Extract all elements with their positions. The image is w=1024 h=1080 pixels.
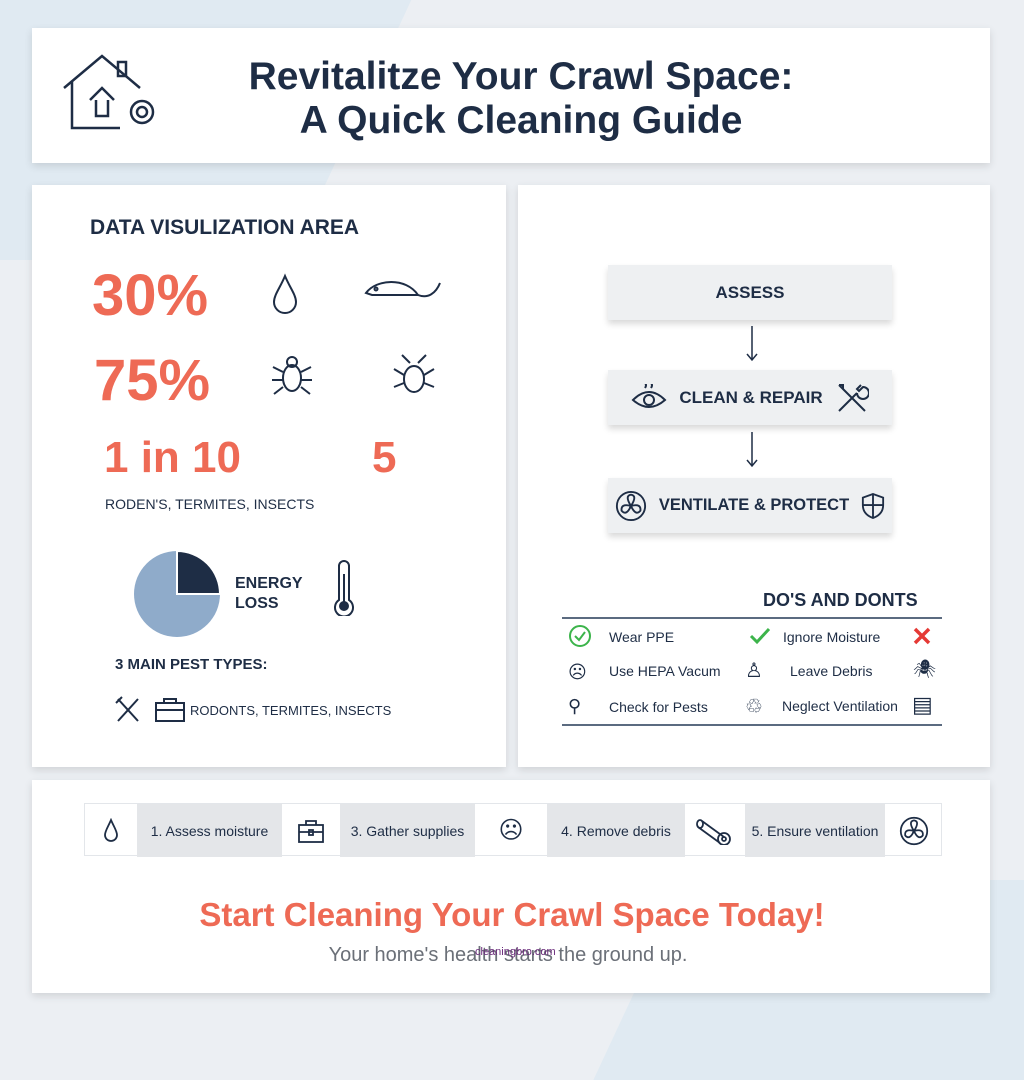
dos and donts: Ignore Moisture bbox=[783, 629, 880, 645]
step icon: fan bbox=[900, 816, 928, 846]
stat 5: 5 bbox=[372, 433, 396, 482]
title: A Quick Cleaning Guide bbox=[300, 99, 742, 142]
step: clean & repair bbox=[608, 370, 892, 425]
row 2: 🕷 bbox=[913, 659, 936, 679]
row 2 bbox=[568, 659, 936, 682]
panel: bottom bbox=[32, 780, 990, 993]
dos and donts: Wear PPE bbox=[609, 629, 674, 645]
icon: cockroach bbox=[394, 354, 434, 393]
icons: tools bbox=[115, 696, 185, 722]
call to action: Start Cleaning Your Crawl Space Today! bbox=[199, 896, 825, 933]
step: ventilate & protect: VENTILATE & PROTECT bbox=[659, 496, 849, 514]
step icon: toolbox bbox=[298, 820, 324, 843]
step 5: 5. Ensure ventilation bbox=[752, 822, 878, 838]
row 2: ☹ bbox=[568, 662, 587, 682]
step: assess bbox=[608, 265, 892, 320]
step 5 bbox=[745, 804, 885, 857]
row 2: Leave Debris bbox=[790, 663, 872, 679]
energy loss label: LOSS bbox=[235, 595, 279, 612]
watermark: cleaningbro.com bbox=[475, 946, 556, 958]
step: assess: ASSESS bbox=[716, 282, 784, 302]
pest types heading: 3 MAIN PEST TYPES: bbox=[115, 656, 268, 673]
step 3: 3. Gather supplies bbox=[351, 822, 464, 838]
icon: bug bbox=[272, 356, 312, 395]
dos and donts bbox=[562, 590, 942, 726]
row 2: ♙ bbox=[745, 660, 763, 682]
stat 30%: 30% bbox=[92, 263, 208, 328]
step: clean & repair: CLEAN & REPAIR bbox=[679, 388, 823, 406]
energy loss label bbox=[235, 575, 303, 612]
icon: water drop bbox=[273, 274, 297, 314]
row 3 bbox=[568, 692, 933, 718]
pest caption: RODEN'S, TERMITES, INSECTS bbox=[105, 496, 314, 512]
step icon: drop bbox=[104, 818, 118, 842]
step: ventilate & protect bbox=[608, 478, 892, 533]
icon: rat bbox=[364, 281, 441, 298]
icon: thermometer bbox=[334, 560, 354, 616]
stat 1 in 10: 1 in 10 bbox=[104, 433, 241, 482]
title panel bbox=[32, 28, 990, 163]
row 3: ▤ bbox=[912, 692, 933, 717]
title bbox=[249, 55, 793, 142]
energy loss label: ENERGY bbox=[235, 575, 303, 592]
arrow bbox=[746, 432, 758, 467]
panel: data visualization bbox=[32, 185, 506, 767]
pie chart bbox=[134, 551, 220, 637]
row 2: Use HEPA Vacum bbox=[609, 663, 721, 679]
row 3: ♲ bbox=[745, 696, 763, 718]
icon: house with gear bbox=[63, 54, 154, 130]
heading: DO'S AND DONTS bbox=[763, 590, 918, 610]
arrow bbox=[746, 326, 758, 361]
heading: DATA VISULIZATION AREA bbox=[90, 216, 359, 239]
title: Revitalitze Your Crawl Space: bbox=[249, 55, 793, 98]
step 3 bbox=[340, 804, 475, 857]
row 3: Check for Pests bbox=[609, 699, 708, 715]
steps strip bbox=[84, 803, 942, 856]
step icon: face: ☹ bbox=[498, 817, 524, 844]
row 3: ⚲ bbox=[568, 696, 581, 716]
step 1: 1. Assess moisture bbox=[151, 822, 268, 838]
panel: process bbox=[518, 185, 990, 767]
step 4 bbox=[547, 804, 685, 857]
row 1 bbox=[569, 625, 930, 647]
pest types text: RODONTS, TERMITES, INSECTS bbox=[190, 703, 391, 718]
step 4: 4. Remove debris bbox=[561, 822, 671, 838]
step 1 bbox=[137, 804, 282, 857]
step icon: roll bbox=[696, 819, 731, 845]
stat 75%: 75% bbox=[94, 348, 210, 413]
row 3: Neglect Ventilation bbox=[782, 698, 898, 714]
tagline: Your home's health starts the ground up. bbox=[329, 944, 687, 966]
